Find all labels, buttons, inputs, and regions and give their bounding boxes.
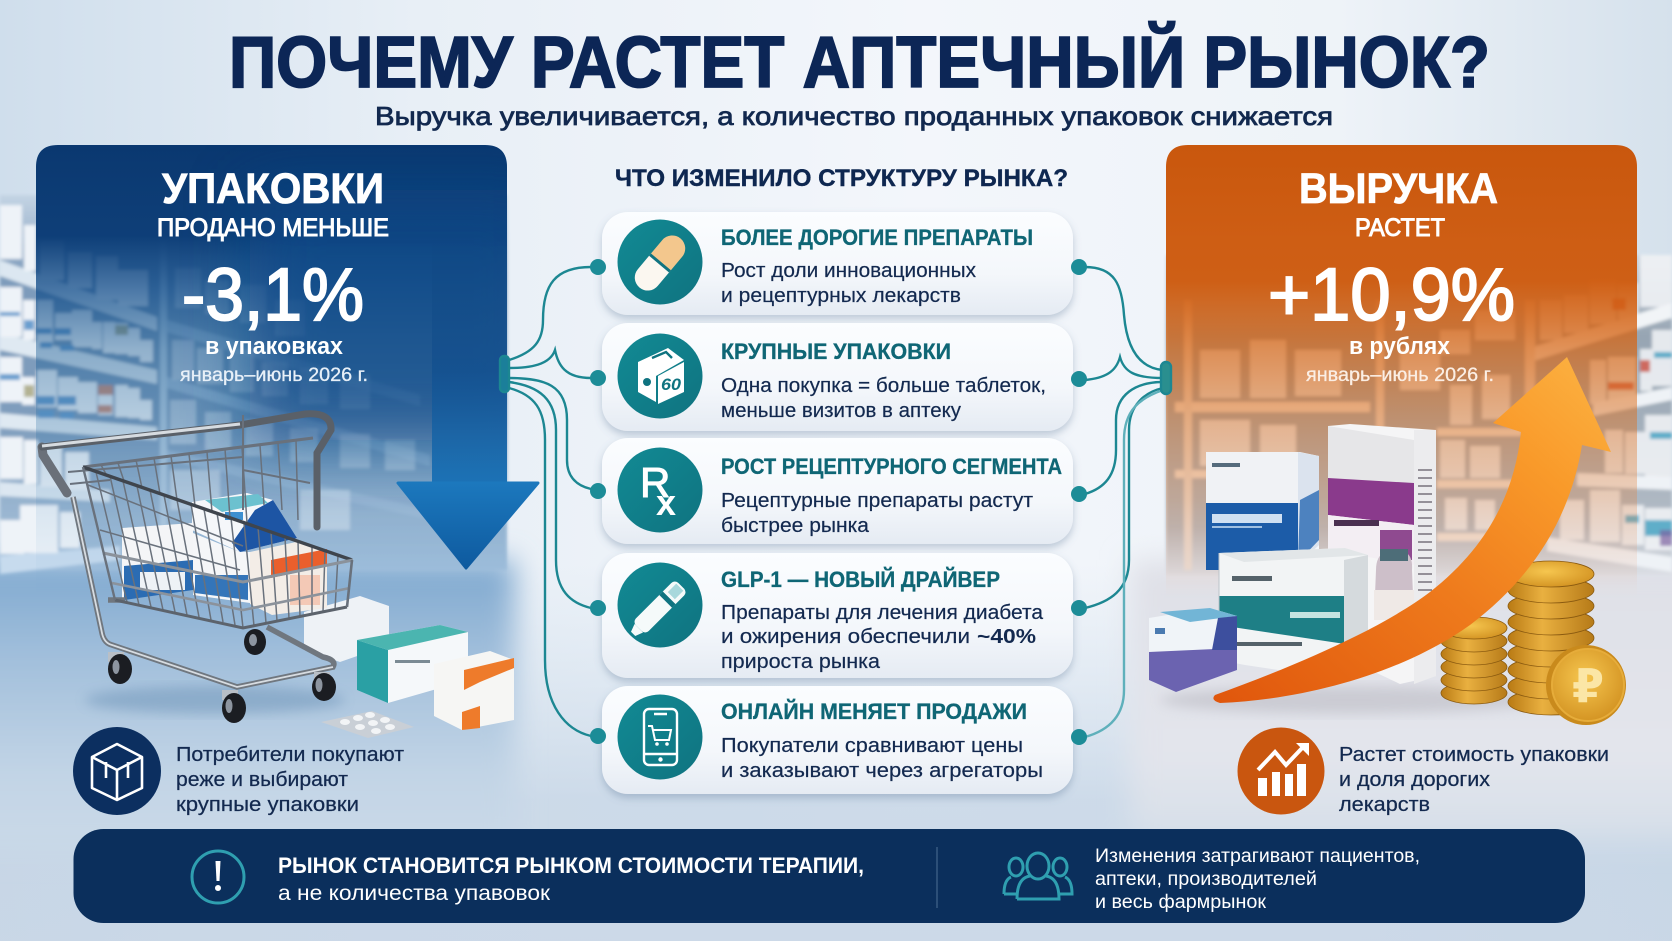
packages period: январь–июнь 2026 г. [180,365,368,386]
card text: Рецептурные препараты растут [721,490,1033,512]
icon: capsule [618,220,702,304]
icon: Rx [618,448,702,532]
up arrow [1213,357,1611,703]
illustration: boxes behind cart [304,596,389,662]
revenue subheading: РАСТЕТ [1355,214,1445,242]
card text: Одна покупка = больше таблеток, [721,375,1046,397]
illustration: boxes and blister [321,625,514,738]
packages heading: УПАКОВКИ [162,165,384,213]
banner statement [278,853,864,905]
banner statement: а не количества упавовок [278,882,551,905]
packages subheading: ПРОДАНО МЕНЬШЕ [157,214,389,242]
card text: Покупатели сравнивают цены [721,735,1023,757]
icon: ruble coin: ₽ [1572,659,1604,713]
card text: быстрее рынка [721,515,870,537]
card: larger packs [590,323,1087,431]
revenue heading: ВЫРУЧКА [1299,165,1498,213]
revenue period: январь–июнь 2026 г. [1306,365,1494,386]
connectors left [500,267,591,736]
card text [721,375,1046,422]
back wheel [244,629,266,655]
card text: и ожирения обеспечили [721,626,970,648]
illustration: coin stacks [1441,561,1594,715]
left note: Потребители покупают [176,744,404,766]
card heading: ОНЛАЙН МЕНЯЕТ ПРОДАЖИ [721,699,1027,724]
icon: Rx: R [640,459,670,506]
card text: меньше визитов в аптеку [721,400,961,422]
card text: ~40% [977,626,1036,648]
illustration: shopping cart [42,414,353,723]
right note [1339,744,1609,816]
right note: и доля дорогих [1339,769,1490,791]
icon: box 60 [618,334,702,418]
subtitle: Выручка увеличивается, а количество проданных упаковок снижается [375,101,1333,131]
icon: box 60: 60 [661,375,682,394]
connectors right [1085,267,1171,737]
packages unit: в упаковках [205,333,344,360]
packages value: -3,1% [182,253,364,336]
banner note [1095,846,1420,913]
banner statement: РЫНОК СТАНОВИТСЯ РЫНКОМ СТОИМОСТИ ТЕРАПИИ, [278,853,864,878]
card: GLP-1 [590,553,1087,678]
card: more expensive drugs [590,212,1087,315]
card text: Препараты для лечения диабета [721,602,1044,624]
blue box [1206,452,1319,570]
card: prescription segment [590,438,1087,544]
icon: injection pen [618,562,702,648]
banner note: Изменения затрагивают пациентов, [1095,846,1420,867]
card heading: КРУПНЫЕ УПАКОВКИ [721,339,951,364]
icon: growth chart [1238,728,1324,814]
revenue value: +10,9% [1268,253,1515,336]
icon: ruble coin [1546,645,1626,725]
left note: реже и выбирают [176,769,348,791]
card text [721,490,1033,537]
card heading: РОСТ РЕЦЕПТУРНОГО СЕГМЕНТА [721,454,1062,479]
tall purple box [1328,424,1436,684]
teal box [1219,548,1368,680]
card text: прироста рынка [721,651,881,673]
card text [721,602,1044,673]
card text: Рост доли инновационных [721,260,976,282]
pharmacy shelves left [0,195,507,574]
card text [721,735,1043,782]
bottom banner [74,829,1585,923]
cart handle [42,447,67,493]
left note: крупные упаковки [176,794,359,816]
vial [1374,549,1414,620]
left note [176,744,404,816]
boxes in cart [122,493,327,615]
icon: exclamation [192,851,244,903]
card heading: GLP-1 — НОВЫЙ ДРАЙВЕР [721,567,1000,592]
right note: лекарств [1339,794,1430,816]
panel: packages [36,145,550,600]
revenue unit: в рублях [1349,333,1451,360]
banner note: и весь фармрынок [1095,892,1267,913]
cart basket [68,415,353,628]
panel: revenue [1166,145,1637,600]
banner note: аптеки, производителей [1095,869,1317,890]
card heading: БОЛЕЕ ДОРОГИЕ ПРЕПАРАТЫ [721,225,1033,250]
card: online sales [590,686,1087,794]
cart frame [73,497,334,687]
card text: и рецептурных лекарств [721,285,961,307]
center heading: ЧТО ИЗМЕНИЛО СТРУКТУРУ РЫНКА? [615,165,1068,192]
title: ПОЧЕМУ РАСТЕТ АПТЕЧНЫЙ РЫНОК? [229,21,1490,103]
pharmacy shelves right [1166,255,1672,580]
card text: и заказывают через агрегаторы [721,760,1043,782]
icon: package [73,727,161,815]
icon: phone with cart [618,694,702,780]
icon: people [1004,853,1072,899]
right note: Растет стоимость упаковки [1339,744,1609,766]
card text [721,260,976,307]
icon: Rx: x [656,482,676,523]
small box [1149,608,1237,692]
illustration: drug boxes [1149,424,1540,714]
down arrow [398,230,538,568]
cart wheels [108,652,336,723]
